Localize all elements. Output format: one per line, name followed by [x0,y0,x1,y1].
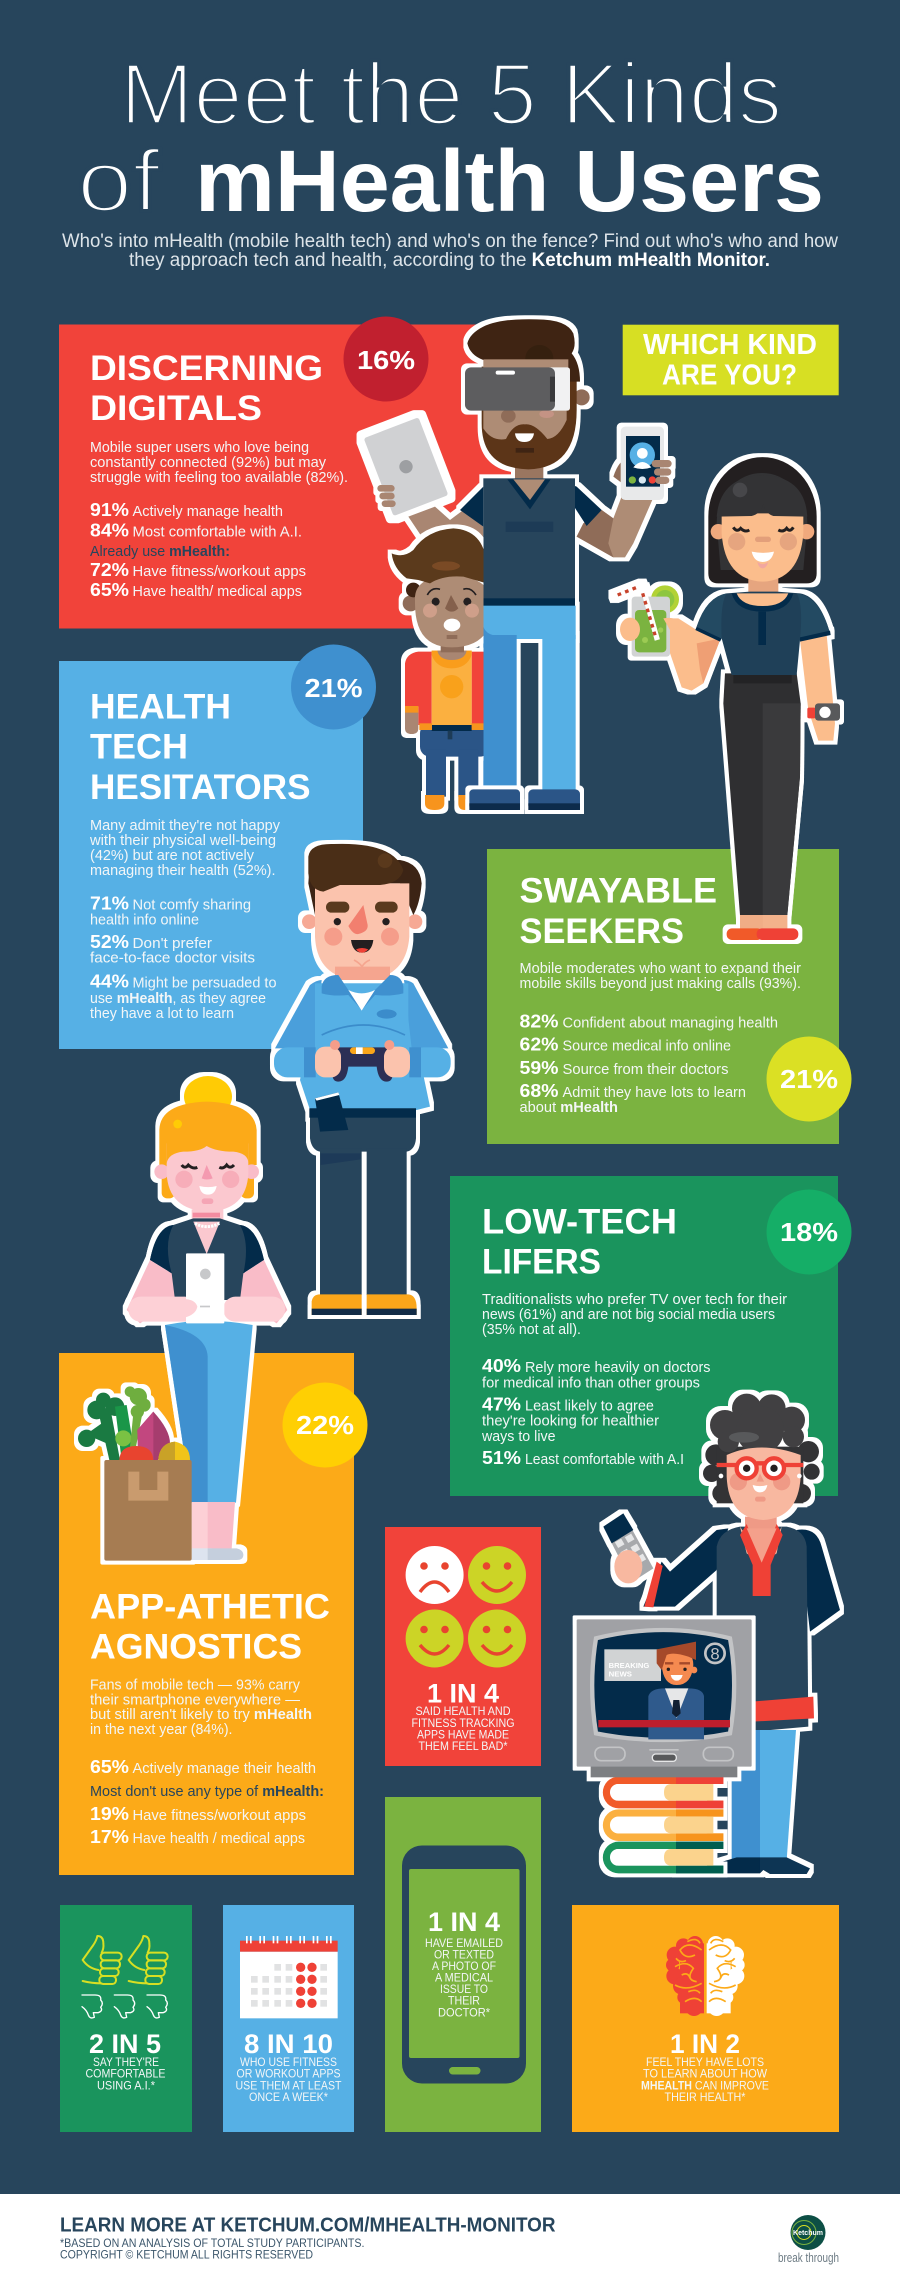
stats: 44% [90,970,129,992]
badge: 22% [282,1382,368,1468]
heading: health tech hesitators: TECH [90,728,188,766]
description [90,440,348,486]
heading: swayable seekers: SEEKERS [520,912,684,951]
curly hair [703,1394,820,1503]
description: but still aren't likely to try mHealth [90,1707,312,1723]
stats: Not comfy sharing [132,898,251,914]
badge: 21% lime [766,1036,852,1122]
stat text: HAVE EMAILED [425,1936,503,1950]
stats: 47% [482,1394,521,1414]
stack of books and television [577,1619,752,1873]
stat text: ISSUE TO [440,1982,488,1996]
stats: 72% [90,559,129,580]
callout: which kind are you [623,325,839,395]
stats [90,892,276,1022]
television [577,1619,752,1777]
badge: 21% blue [291,644,376,730]
stat text: A PHOTO OF [432,1959,496,1973]
stats [90,1756,324,1847]
stat text: USING A.I.* [97,2078,155,2092]
footer [0,2194,900,2284]
stats: Most comfortable with A.I. [132,524,302,540]
stat text: OR WORKOUT APPS [236,2067,340,2081]
brain right half [707,1936,745,2016]
stats: Already use mHealth: [90,544,230,560]
stat text: THEIR [448,1994,480,2008]
stats: 40% [482,1355,521,1376]
stats: 19% [90,1803,129,1824]
heading: discerning digitals: DIGITALS [90,389,262,428]
character: woman with TV remote [603,1394,840,1874]
thumb up 2 [129,1936,168,1984]
stats: 17% [90,1826,129,1847]
icon: smiley faces [406,1546,526,1668]
badge: 21% blue: 21% [304,673,362,703]
stat text: OR TEXTED [434,1947,494,1961]
character: man with game controller [274,844,451,1315]
stats: health info online [90,912,199,928]
stat text: ONCE A WEEK* [249,2090,328,2104]
stats: Least comfortable with A.I [525,1452,684,1468]
stats: Source medical info online [562,1038,731,1054]
panel: 1 in 2 lots to learn [572,1905,839,2132]
stat text [412,1678,514,1753]
badge: 16%: 16% [357,345,415,375]
panel: discerning digitals [59,324,515,628]
stats: use mHealth, as they agree [90,991,266,1007]
stats: face-to-face doctor visits [90,950,255,966]
stats [90,499,306,600]
stat text: 1 IN 4 [427,1678,499,1708]
description [482,1292,787,1338]
stats: they have a lot to learn [90,1006,234,1022]
stats: 52% [90,931,129,952]
heading: app-athetic agnostics: AGNOSTICS [90,1628,302,1666]
panel: low-tech lifers [450,1176,838,1496]
description: mobile skills beyond just making calls (93%). [520,976,801,992]
logo: ketchum break through: break through [778,2250,839,2265]
heading: health tech hesitators [90,688,310,807]
heading: swayable seekers [520,872,717,951]
description: Mobile moderates who want to expand their [520,961,801,977]
stats: Have health/ medical apps [132,584,302,600]
heading: health tech hesitators: HESITATORS [90,768,310,807]
thumb up 1 [83,1936,122,1984]
stats: Have fitness/workout apps [132,1808,306,1824]
description: their smartphone everywhere — [90,1692,300,1708]
stats: Confident about managing health [562,1016,778,1032]
stat text: USE THEM AT LEAST [236,2078,342,2092]
stat text: THEM FEEL BAD* [418,1739,508,1753]
stat text [641,2029,769,2104]
badge: 18%: 18% [780,1217,838,1247]
title: Meet the 5 Kinds [120,46,782,143]
description: constantly connected (92%) but may [90,455,327,471]
description: (42%) but are not actively [90,848,255,864]
description [90,1678,312,1738]
stats: 68% [520,1080,558,1101]
description: Mobile super users who love being [90,440,309,456]
intro text: Who's into mHealth (mobile health tech) and who's on the fence? Find out who's who and how [62,231,838,252]
description: in the next year (84%). [90,1722,232,1738]
stats: Have fitness/workout apps [132,564,306,580]
stats: Source from their doctors [562,1062,728,1078]
badge: 22%: 22% [296,1410,354,1440]
stat text: MHEALTH CAN IMPROVE [641,2078,769,2092]
badge: 16% [344,316,428,402]
stat text: WHO USE FITNESS [240,2055,337,2069]
stat text: THEIR HEALTH* [664,2090,746,2104]
heading: low-tech lifers: LIFERS [482,1242,601,1282]
stats: Admit they have lots to learn [562,1085,746,1101]
stats: 59% [520,1057,558,1078]
brain left half [666,1936,704,2016]
description: Many admit they're not happy [90,818,281,834]
stat text: A MEDICAL [435,1970,493,1984]
television: 8 [710,1644,720,1663]
description [520,961,801,992]
character: woman with groceries [78,1076,287,1561]
stats: Don't prefer [132,936,212,952]
television: BREAKING [609,1661,650,1670]
stat text [86,2029,166,2092]
callout: which kind are you: WHICH KIND [643,329,817,361]
description: (35% not at all). [482,1322,581,1338]
stats [481,1355,710,1468]
title: of [77,133,161,230]
title [77,46,824,230]
stat text: DOCTOR* [438,2006,490,2020]
stats: 71% [90,892,129,914]
stat text: COMFORTABLE [86,2067,166,2081]
footnote: COPYRIGHT © KETCHUM ALL RIGHTS RESERVED [60,2250,313,2262]
badge: 21% lime: 21% [780,1064,838,1094]
stats: 65% [90,1756,129,1777]
stats: 82% [520,1010,558,1032]
man's front shoe [469,789,520,810]
stat text [236,2029,342,2104]
stat text: 2 IN 5 [89,2029,161,2059]
character: man with VR headset [359,319,672,810]
description: Fans of mobile tech — 93% carry [90,1678,301,1694]
stats: 62% [520,1034,558,1054]
stats: Might be persuaded to [132,976,276,992]
character: woman with green drink [613,457,840,940]
panel: app-athetic agnostics [59,1353,354,1875]
icon: calendar [240,1936,338,2018]
badge: 18% [766,1190,852,1274]
description: managing their health (52%). [90,863,276,879]
stat text: 1 IN 4 [428,1907,500,1937]
panel: 8 in 10 weekly [223,1905,354,2132]
heading: app-athetic agnostics: APP-ATHETIC [90,1588,330,1626]
stats: Have health / medical apps [132,1831,305,1847]
icon: thumbs up and down [82,1936,168,2018]
television: NEWS [609,1670,632,1679]
stats: Least likely to agree [525,1398,654,1414]
stats: for medical info than other groups [482,1376,700,1392]
stats: Rely more heavily on doctors [525,1360,710,1376]
panel: 1 in 4 emailed photo [385,1797,541,2132]
stat text [425,1907,503,2020]
book: green [603,1842,723,1873]
stat text: 1 IN 2 [670,2029,740,2059]
footnote: *BASED ON AN ANALYSIS OF TOTAL STUDY PARTICIPANTS. [60,2238,364,2250]
panel: 1 in 4 feel bad [385,1527,541,1766]
stats: Most don't use any type of mHealth: [90,1784,324,1800]
stat text: 8 IN 10 [244,2029,333,2059]
logo: ketchum break through [778,2215,839,2265]
icon: brain [666,1936,745,2016]
stats: about mHealth [520,1100,618,1116]
description: Traditionalists who prefer TV over tech for their [482,1292,787,1308]
heading: low-tech lifers: LOW-TECH [482,1202,677,1242]
description: with their physical well-being [89,833,276,849]
stat text: FEEL THEY HAVE LOTS [646,2055,764,2069]
stat text: SAID HEALTH AND [416,1704,511,1718]
character: boy [392,528,493,810]
stat text: FITNESS TRACKING [412,1716,514,1730]
panel: 2 in 5 comfortable [60,1905,192,2132]
heading: low-tech lifers [482,1202,677,1282]
description: news (61%) and are not big social media users [482,1307,775,1323]
logo: ketchum break through: Ketchum [793,2230,823,2237]
stats [520,1010,778,1116]
groceries [78,1386,192,1561]
book: orange [603,1809,723,1841]
title: mHealth Users [195,133,824,230]
stats: ways to live [481,1429,556,1445]
panel: swayable seekers [487,849,839,1144]
stats: 84% [90,520,129,540]
stats: they're looking for healthier [482,1414,659,1430]
footnote [60,2238,364,2262]
stats: 91% [90,499,129,520]
stats: 65% [90,579,129,600]
heading: health tech hesitators: HEALTH [90,688,231,726]
stats: 51% [482,1447,521,1468]
description: struggle with feeling too available (82%). [90,470,348,486]
heading: swayable seekers: SWAYABLE [520,872,717,910]
panel: health tech hesitators [59,661,363,1049]
book: red [603,1777,723,1808]
intro text: they approach tech and health, according to the Ketchum mHealth Monitor. [129,250,770,271]
heading: discerning digitals [90,349,323,428]
heading: discerning digitals: DISCERNING [90,349,323,388]
stats: Actively manage their health [132,1761,316,1777]
heading: app-athetic agnostics [90,1588,330,1666]
footer link: LEARN MORE AT KETCHUM.COM/MHEALTH-MONITOR [60,2214,556,2236]
icon: smartphone [402,1846,526,2084]
description [89,818,281,879]
intro text [62,231,838,271]
stat text: TO LEARN ABOUT HOW [643,2067,768,2081]
stats: Actively manage health [132,504,283,520]
callout: which kind are you: ARE YOU? [662,360,797,392]
thumbs down [82,1995,167,2018]
stat text: SAY THEY'RE [93,2055,159,2069]
stat text: APPS HAVE MADE [417,1728,509,1742]
